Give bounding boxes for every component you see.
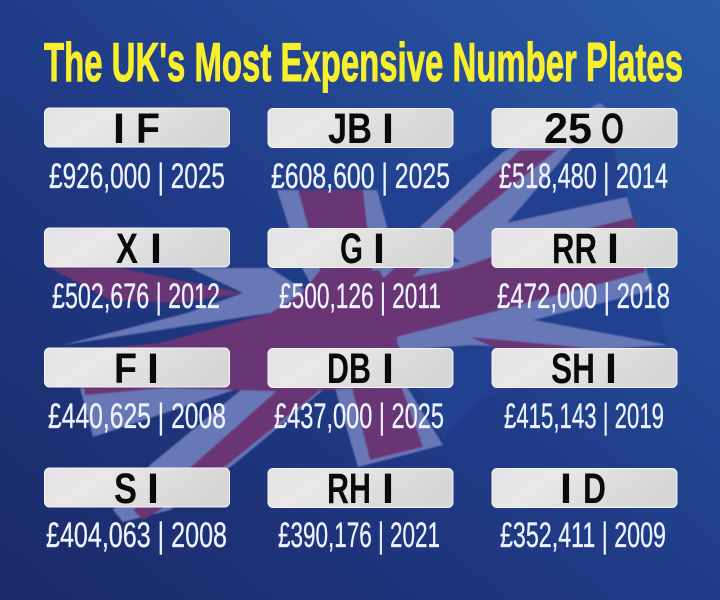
plate: SH I [492, 345, 677, 393]
plate: G I: G [340, 225, 363, 273]
price: S I: £404,063 | 2008 [46, 516, 227, 555]
plate: 25 O [492, 105, 677, 153]
plate: DB I: I [382, 345, 394, 393]
plate: I F [44, 105, 230, 153]
plate: SH I: SH [551, 345, 595, 393]
price: I F: £926,000 | 2025 [49, 157, 225, 196]
plate entry: RH I [268, 465, 453, 555]
price: JB I: £608,600 | 2025 [271, 157, 450, 196]
plate: F I: F [114, 345, 137, 393]
plate: F I [44, 345, 230, 393]
plate: SH I: I [605, 345, 617, 393]
plate: S I: S [114, 465, 137, 513]
plate: S I [44, 465, 230, 513]
plate: DB I [268, 345, 453, 393]
plate: RR I: RR [552, 225, 597, 273]
plate: 25 O: O [601, 105, 624, 153]
plate entry: JB I [268, 105, 453, 196]
plate: JB I: JB [328, 105, 372, 153]
plate: DB I: DB [327, 345, 371, 393]
plate: RR I: I [607, 225, 619, 273]
price: X I: £502,676 | 2012 [52, 277, 220, 316]
plate: I D: D [583, 465, 606, 513]
plate entry: G I [268, 225, 453, 316]
plate: S I: I [147, 465, 159, 513]
plate: F I: I [147, 345, 159, 393]
plate entry: I F [44, 105, 230, 196]
plate: JB I: I [382, 105, 394, 153]
plate: I F: F [136, 105, 160, 153]
plate entry: SH I [492, 345, 677, 436]
price: DB I: £437,000 | 2025 [274, 397, 444, 436]
union flag [50, 103, 668, 522]
plate: I D [492, 465, 677, 513]
price: RH I: £390,176 | 2021 [278, 516, 440, 555]
plate: JB I [268, 105, 453, 153]
plate: I F: I [113, 105, 125, 153]
plate: G I [268, 225, 453, 273]
price: G I: £500,126 | 2011 [279, 277, 441, 316]
plate entry: I D [492, 465, 677, 555]
plate entry: F I [44, 345, 230, 436]
plate: X I: X [116, 225, 138, 273]
plate entry: X I [44, 225, 230, 316]
plate: RH I [268, 465, 453, 513]
plate: I D: I [560, 465, 572, 513]
plate entry: S I [44, 465, 230, 555]
plate entry: 25 O [492, 105, 677, 196]
plate: X I: I [150, 225, 162, 273]
plate: 25 O: 25 [544, 105, 592, 153]
plate entry: RR I [492, 225, 677, 316]
plate entry: DB I [268, 345, 453, 436]
plate: X I [44, 225, 230, 273]
price: F I: £440,625 | 2008 [48, 397, 226, 436]
plate: RH I: I [382, 465, 394, 513]
plate: RR I [492, 225, 677, 273]
plate: RH I: RH [327, 465, 371, 513]
plate: G I: I [373, 225, 385, 273]
